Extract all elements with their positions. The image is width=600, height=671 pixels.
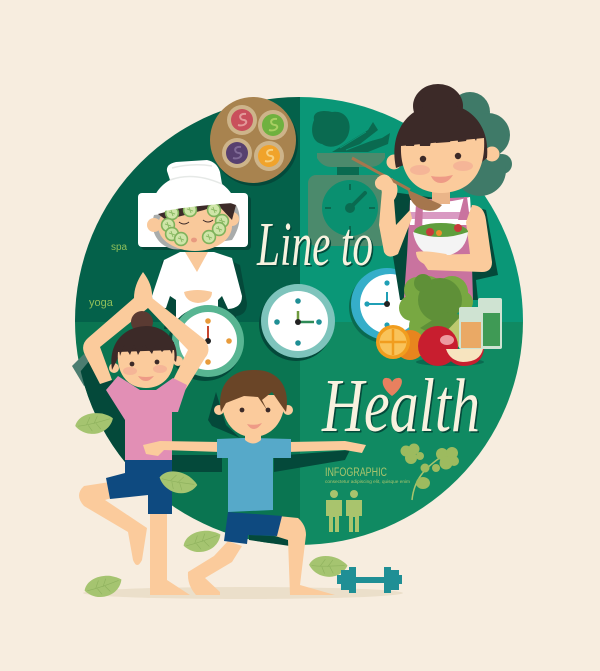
navy shorts bbox=[106, 460, 172, 514]
apple slice bbox=[445, 349, 484, 366]
orange bbox=[376, 325, 425, 360]
cook: drop shadow on disc bbox=[392, 92, 512, 300]
towel turban bbox=[153, 160, 233, 213]
green quadrant disc bbox=[70, 90, 530, 552]
ground tint bbox=[416, 358, 484, 366]
brown hair bbox=[220, 370, 287, 412]
ground shadow bbox=[83, 587, 403, 599]
right arm bbox=[418, 205, 492, 272]
bent leg bbox=[79, 482, 147, 565]
salad bowl bbox=[413, 223, 468, 255]
arms bbox=[83, 272, 208, 392]
back leg bbox=[188, 541, 242, 595]
hand under bowl bbox=[416, 251, 458, 266]
cucumber slices bbox=[161, 203, 229, 246]
neck bbox=[245, 430, 261, 444]
apron and top bbox=[403, 197, 473, 310]
head bbox=[222, 395, 284, 437]
script title: Health: Health bbox=[323, 366, 482, 450]
script title: Line to bbox=[256, 211, 374, 280]
orange pot bbox=[254, 141, 284, 171]
face bbox=[401, 138, 484, 193]
icon: heart bbox=[383, 378, 402, 396]
icon: dumbbell bbox=[337, 567, 402, 593]
front leg bbox=[272, 516, 335, 595]
face bbox=[158, 201, 232, 251]
script title: Health: Health bbox=[321, 364, 480, 448]
yoga label: yoga bbox=[89, 297, 114, 309]
pillow bbox=[141, 196, 251, 250]
woman eating salad bbox=[352, 84, 500, 310]
INFOGRAPHIC heading: INFOGRAPHIC bbox=[325, 467, 387, 479]
infographic canvas bbox=[72, 84, 523, 599]
spa label: spa bbox=[111, 242, 128, 253]
ears bbox=[386, 154, 402, 170]
apple bbox=[418, 326, 484, 366]
spa woman with cucumber mask bbox=[138, 160, 251, 329]
food group bbox=[376, 274, 502, 366]
girl: shadow on disc bbox=[72, 354, 125, 462]
fringe bbox=[406, 126, 480, 146]
robe bbox=[156, 256, 247, 329]
purple pot bbox=[222, 138, 252, 168]
clock: right blue bbox=[349, 268, 423, 343]
hair bbox=[394, 104, 487, 168]
boy: shadows on disc bbox=[172, 392, 350, 546]
neck bbox=[432, 190, 450, 204]
girl doing tree pose bbox=[79, 272, 208, 595]
ears bbox=[214, 405, 224, 415]
standing leg bbox=[150, 510, 190, 595]
blue shirt bbox=[217, 438, 291, 512]
clock: centre teal bbox=[259, 284, 335, 361]
left arm bbox=[375, 178, 412, 257]
hand on spoon bbox=[377, 174, 396, 193]
falling leaves bbox=[75, 411, 349, 597]
ghost food scale icon bbox=[308, 111, 390, 246]
juice glass: green bbox=[478, 298, 502, 349]
icon: plant sprig bbox=[400, 444, 459, 500]
pink shirt bbox=[106, 376, 187, 461]
broccoli bbox=[399, 274, 473, 360]
head bbox=[131, 311, 153, 333]
INFOGRAPHIC subtext: consectetur adipiscing elit, quisque enim bbox=[325, 479, 410, 484]
navy shorts bbox=[224, 512, 282, 544]
red pot bbox=[227, 105, 257, 135]
juice glass: orange bbox=[459, 307, 483, 349]
green pot bbox=[258, 110, 288, 140]
script title: Line to: Line to bbox=[258, 212, 374, 280]
arms bbox=[143, 441, 220, 456]
icon: two people bbox=[326, 490, 362, 532]
boy in warrior pose bbox=[143, 370, 366, 595]
spoon bbox=[352, 158, 442, 211]
hair bun bbox=[413, 84, 463, 128]
clock: left orange bbox=[168, 305, 244, 381]
script title: Line to: Line to bbox=[256, 211, 373, 279]
herb tray with four pots bbox=[210, 97, 298, 186]
